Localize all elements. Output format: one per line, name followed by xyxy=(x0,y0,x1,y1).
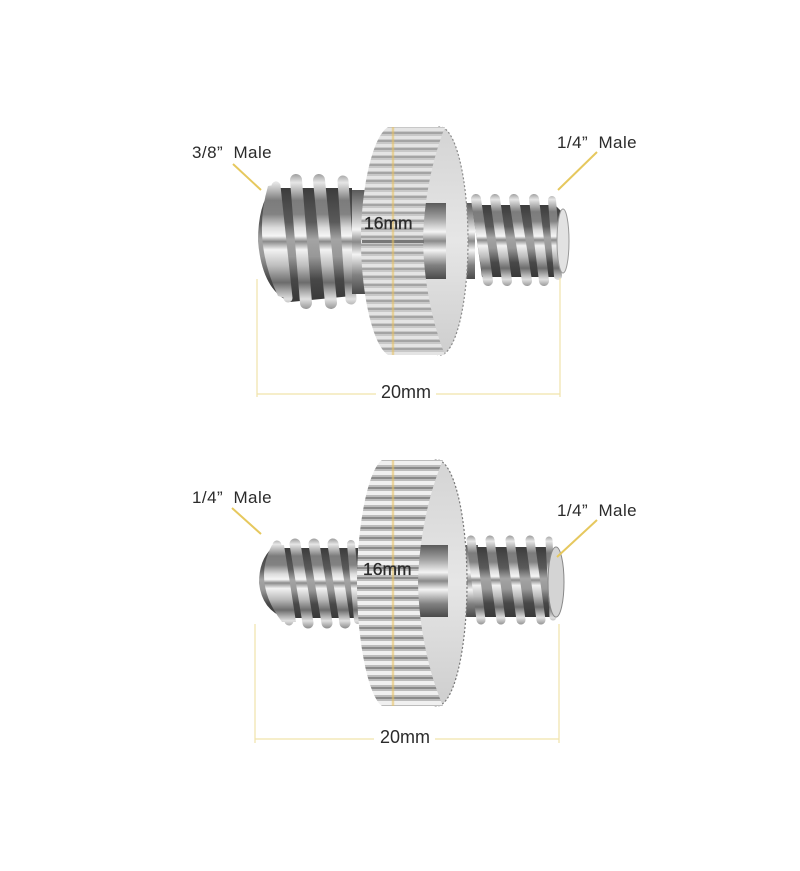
16mm label: 16mm xyxy=(364,213,413,233)
knob centre shadow xyxy=(362,240,424,243)
arrow xyxy=(232,508,261,534)
callout: 1/4 male, bottom right xyxy=(557,501,637,557)
right 1/4 inch thread xyxy=(418,540,553,620)
arrow xyxy=(557,520,597,557)
callout: 1/4 male, top right xyxy=(557,133,637,190)
yellow diameter line xyxy=(392,460,394,706)
yellow diameter line xyxy=(392,127,394,355)
left 3/8 inch thread xyxy=(258,180,352,303)
callout: 1/4 male, bottom left xyxy=(192,488,272,534)
right end face xyxy=(548,547,564,617)
knob disc face xyxy=(407,460,467,706)
bottom adapter: 1/4 to 1/4 screw xyxy=(259,460,564,706)
right neck on disc xyxy=(418,545,448,617)
callout: 3/8 male, top left: 3/8” Male xyxy=(192,143,272,162)
20mm dimension, bottom xyxy=(255,624,559,747)
left 1/4 inch thread xyxy=(259,544,358,623)
knob disc face xyxy=(412,127,468,355)
callout: 1/4 male, bottom left: 1/4” Male xyxy=(192,488,272,507)
right 1/4 inch thread xyxy=(420,199,565,281)
knurled knob xyxy=(357,460,443,706)
callout: 3/8 male, top left xyxy=(192,143,272,190)
right end face xyxy=(557,209,569,273)
knurled knob xyxy=(361,127,445,355)
arrow xyxy=(233,164,261,190)
right neck on disc xyxy=(422,203,446,279)
arrow xyxy=(558,152,597,190)
20mm label top: 20mm xyxy=(381,382,431,402)
left neck xyxy=(352,190,366,294)
top adapter: 3/8 to 1/4 screw xyxy=(258,127,569,355)
20mm dimension, top xyxy=(257,278,560,402)
20mm label bottom: 20mm xyxy=(380,727,430,747)
callout: 1/4 male, bottom right: 1/4” Male xyxy=(557,501,637,520)
callout: 1/4 male, top right: 1/4” Male xyxy=(557,133,637,152)
16mm label: 16mm xyxy=(363,559,412,579)
